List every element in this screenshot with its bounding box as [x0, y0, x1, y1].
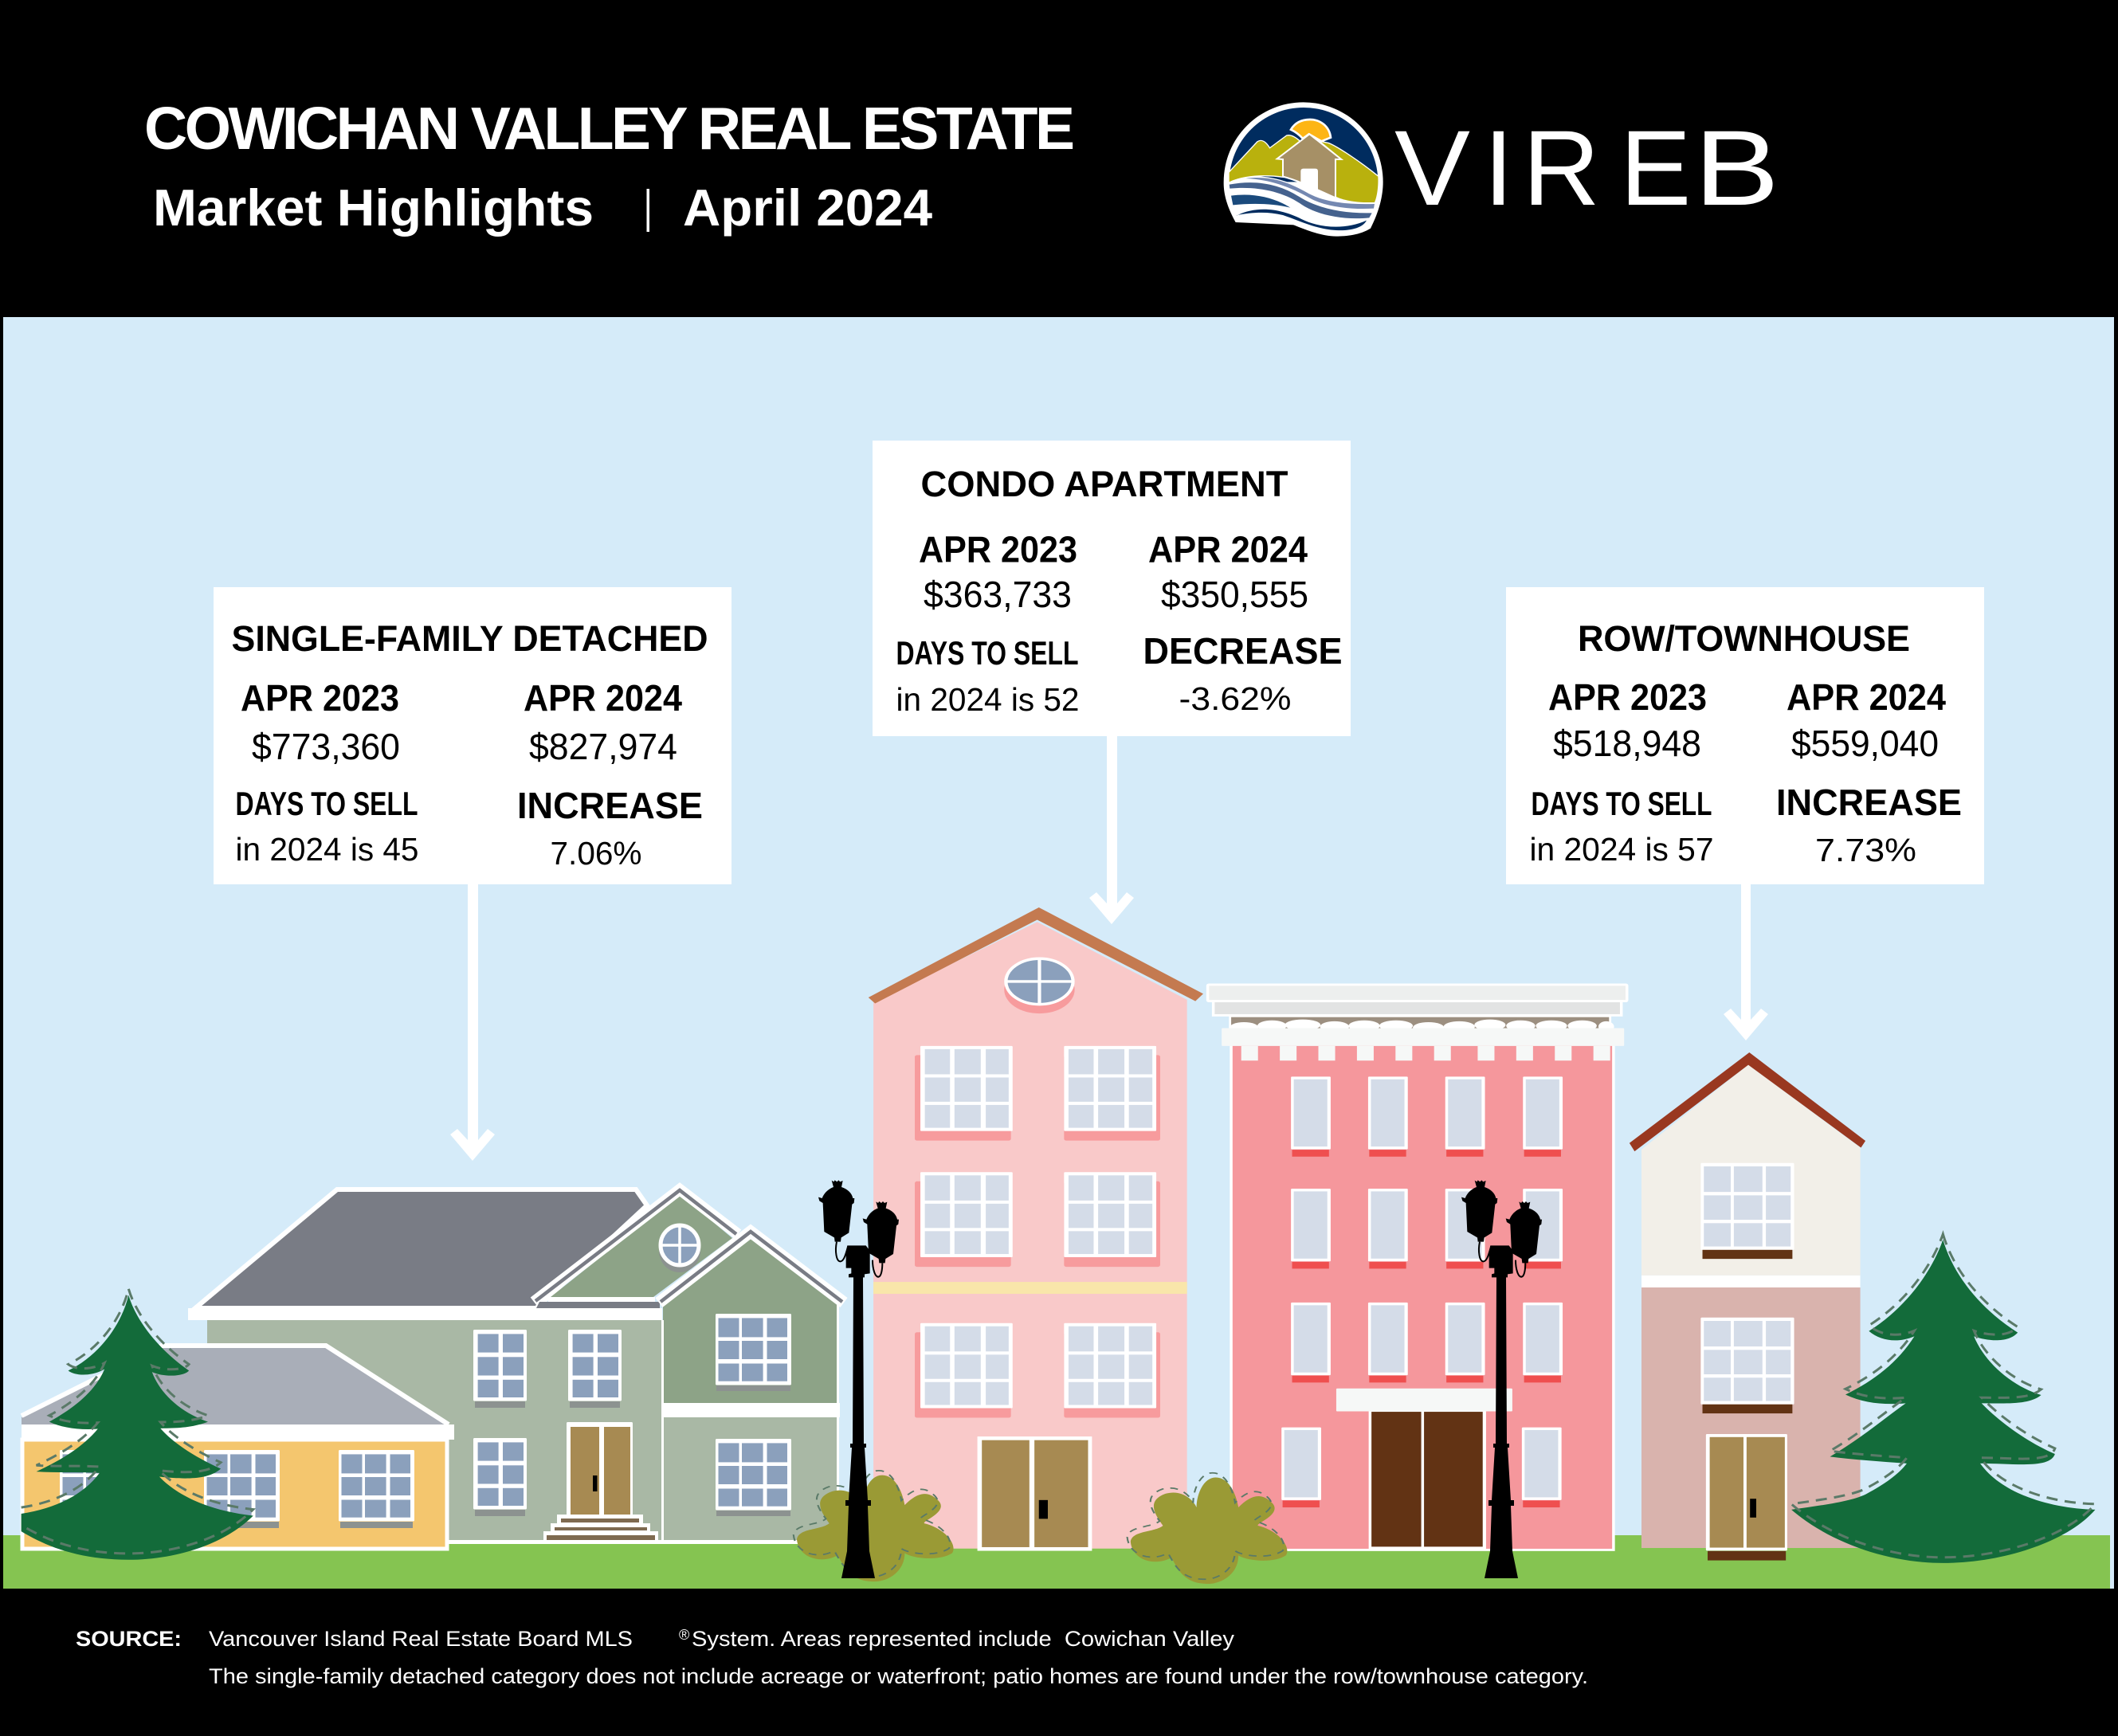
source line continued: System. Areas represented include Cowichan Valley	[692, 1627, 1235, 1651]
price 2024: $559,040	[1791, 723, 1939, 764]
label: APR 2023: APR 2023	[1548, 676, 1707, 718]
front door	[567, 1422, 633, 1515]
change label: DECREASE	[1143, 630, 1342, 672]
annex sills	[206, 1522, 413, 1528]
arrow: single-family	[450, 884, 495, 1161]
condo building	[869, 907, 1203, 1551]
label: APR 2023: APR 2023	[919, 529, 1077, 570]
subtitle: date: April 2024	[683, 178, 932, 237]
logo wordmark: B	[1694, 109, 1779, 228]
upper wall	[1641, 1065, 1861, 1276]
logo wordmark	[1394, 109, 1779, 228]
wing lower wall	[663, 1417, 837, 1541]
annex roof	[22, 1346, 449, 1424]
apartment building	[1208, 985, 1627, 1550]
round attic window	[1004, 958, 1075, 1013]
arrow: townhouse	[1724, 884, 1768, 1040]
price 2023: $518,948	[1553, 723, 1701, 764]
label: APR 2024: APR 2024	[524, 677, 682, 719]
second cornice	[1214, 1001, 1622, 1015]
townhouse	[1630, 1052, 1865, 1561]
grass	[3, 1535, 2110, 1589]
label: APR 2024: APR 2024	[1787, 676, 1946, 718]
arrow: condo	[1089, 736, 1134, 924]
door	[1706, 1434, 1787, 1561]
entrance door	[1369, 1411, 1486, 1550]
days to sell value: in 2024 is 52	[896, 681, 1079, 718]
source line: Vancouver Island Real Estate Board MLS	[209, 1627, 633, 1651]
single-family house	[22, 1189, 844, 1549]
change value: -3.62%	[1179, 680, 1291, 717]
annex roof edge	[22, 1346, 449, 1424]
shrub: right	[1128, 1473, 1287, 1584]
round gable window	[659, 1225, 700, 1272]
subtitle divider	[647, 189, 649, 232]
subtitle: market highlights: Market Highlights	[153, 178, 594, 237]
lower wall	[1641, 1287, 1861, 1548]
roof	[1630, 1052, 1865, 1151]
base line	[446, 1540, 840, 1544]
window sills	[475, 1385, 790, 1516]
days to sell label: DAYS TO SELL	[896, 634, 1079, 672]
building wall	[1231, 1043, 1614, 1550]
entrance canopy	[1336, 1389, 1512, 1411]
change label: INCREASE	[1776, 782, 1962, 823]
shrub: left	[794, 1471, 954, 1581]
cornice brown strip	[1230, 1017, 1610, 1030]
label: APR 2024: APR 2024	[1148, 529, 1308, 570]
title: COWICHAN VALLEY REAL ESTATE	[144, 95, 1075, 162]
front steps	[543, 1515, 658, 1541]
price 2024: $827,974	[529, 726, 677, 767]
days to sell value: in 2024 is 57	[1530, 831, 1713, 868]
condo windows	[915, 1046, 1160, 1418]
price 2023: $363,733	[924, 574, 1072, 615]
price 2024: $350,555	[1161, 574, 1308, 615]
tree: left evergreen	[22, 1289, 253, 1560]
header	[144, 95, 1779, 237]
tree: right evergreen	[1791, 1234, 2095, 1563]
top cornice	[1208, 985, 1627, 1001]
annex beam	[22, 1424, 454, 1440]
logo wordmark: E	[1620, 109, 1691, 228]
windows	[473, 1314, 791, 1511]
gable roofline	[534, 1189, 738, 1302]
wing band	[661, 1403, 840, 1417]
wing right edge	[837, 1303, 839, 1541]
icon: VIREB logo emblem	[1224, 102, 1383, 237]
lower window	[1700, 1318, 1794, 1413]
annex windows	[60, 1450, 414, 1522]
floor band	[1641, 1276, 1861, 1287]
days to sell value: in 2024 is 45	[236, 831, 419, 868]
callout heading: CONDO APARTMENT	[921, 464, 1288, 504]
logo wordmark: V	[1394, 109, 1470, 228]
street lamp: left	[818, 1180, 899, 1578]
condo roof	[869, 907, 1203, 1003]
logo wordmark: R	[1523, 109, 1600, 228]
street lamp: right	[1461, 1180, 1542, 1578]
label: APR 2023: APR 2023	[241, 677, 399, 719]
logo wordmark: I	[1484, 109, 1513, 228]
floor band	[873, 1282, 1187, 1294]
callout heading: SINGLE-FAMILY DETACHED	[231, 618, 708, 659]
wing roof stripe	[661, 1232, 842, 1302]
dentils	[1241, 1046, 1610, 1060]
panel: row/townhouse callout	[1506, 587, 1984, 884]
panel: condo apartment callout	[873, 441, 1351, 736]
days to sell label: DAYS TO SELL	[1532, 785, 1712, 822]
main roof	[195, 1189, 647, 1308]
upper wall	[207, 1320, 662, 1542]
footer: source notes	[76, 1627, 1588, 1688]
wing upper wall	[663, 1234, 837, 1403]
apartment windows	[1281, 1076, 1563, 1507]
panel: single-family detached callout	[214, 587, 731, 884]
strip beneath gable	[536, 1302, 660, 1308]
registered mark: ®	[679, 1627, 689, 1643]
lower cornice	[1222, 1028, 1624, 1046]
change value: 7.73%	[1815, 832, 1916, 868]
category note: The single-family detached category does not include acreage or waterfront; patio homes are found under the row/townhouse category.	[209, 1664, 1588, 1688]
scalloped trim	[1230, 1020, 1614, 1033]
sky	[3, 317, 2114, 1589]
source label: SOURCE:	[76, 1627, 182, 1651]
gable roof stripe	[535, 1190, 736, 1301]
price 2023: $773,360	[252, 726, 400, 767]
change label: INCREASE	[517, 785, 703, 826]
condo door	[978, 1436, 1092, 1551]
annex wall	[22, 1440, 447, 1549]
wing separator	[661, 1320, 664, 1541]
gable	[551, 1194, 732, 1297]
roof beam	[188, 1308, 662, 1320]
upper window	[1700, 1163, 1794, 1259]
callout heading: ROW/TOWNHOUSE	[1578, 618, 1910, 659]
strip above roof beam	[548, 1297, 655, 1302]
change value: 7.06%	[550, 835, 642, 872]
wing roofline	[659, 1232, 844, 1303]
days to sell label: DAYS TO SELL	[236, 785, 418, 822]
condo wall	[873, 922, 1187, 1549]
